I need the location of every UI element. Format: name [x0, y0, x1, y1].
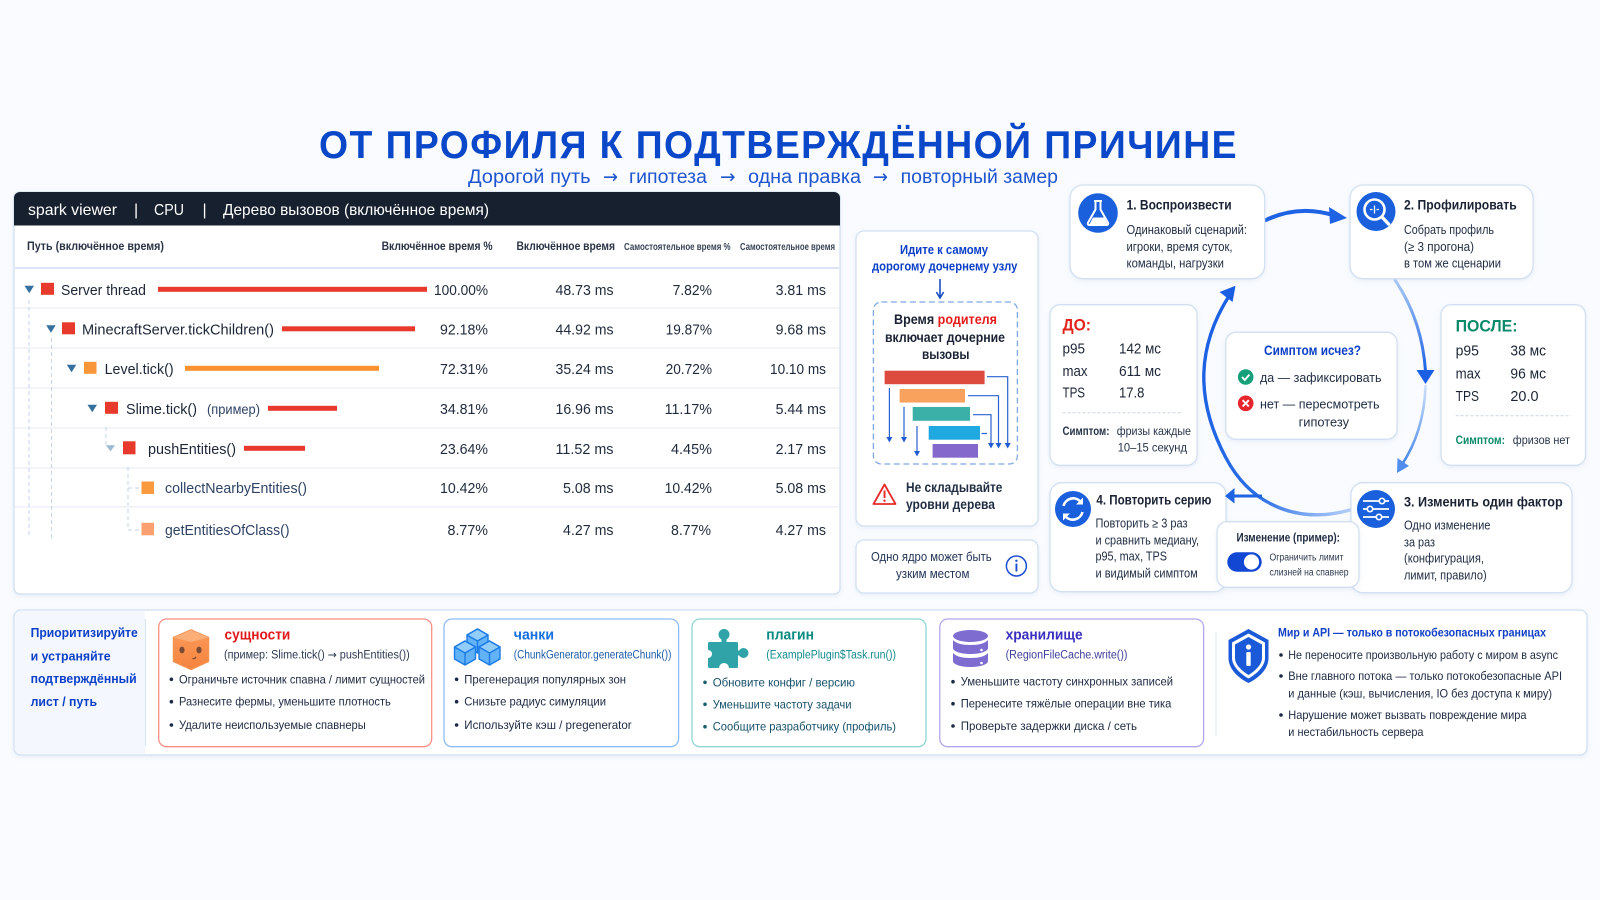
panel: step 3 change one factor: Одно изменение: [1404, 519, 1491, 533]
prioritize label: [31, 625, 138, 709]
toggle: [1227, 552, 1262, 572]
panel: one core note: [856, 540, 1038, 593]
icon: puzzle: [704, 629, 748, 673]
panel: before metrics: [1050, 305, 1197, 465]
dashed box: parent includes children: [873, 302, 1017, 464]
panel: step 3 change one factor: за раз: [1404, 535, 1435, 549]
arrow: step 1 to step 2: [1266, 207, 1347, 224]
panel: step 2 profile: Собрать профиль: [1404, 223, 1494, 237]
panel: change example toggle: Ограничить лимит: [1270, 553, 1344, 564]
panel: before metrics: фризы каждые: [1117, 424, 1191, 438]
panel: step 4 repeat: Повторить ≥ 3 раз: [1096, 517, 1188, 531]
row: Slime.tick: 5.44 ms: [776, 402, 826, 418]
dashed box: parent includes children: включает дочерние: [885, 330, 1005, 345]
card: storage: [940, 619, 1204, 747]
row: Server thread: [24, 282, 826, 299]
thread safety notes: Вне главного потока — только потокобезопасные API: [1288, 669, 1562, 683]
panel: after metrics: 38 мс: [1510, 343, 1546, 359]
panel: before metrics: 10–15 секунд: [1118, 441, 1187, 455]
thread safety notes: Мир и API — только в потокобезопасных границах: [1278, 626, 1546, 640]
row: Level.tick: [67, 361, 826, 378]
subtitle: одна правка: [748, 167, 861, 188]
icon: refresh: [1055, 491, 1091, 527]
panel: after metrics: 20.0: [1510, 389, 1538, 405]
warning: уровни дерева: [906, 497, 995, 512]
row: pushEntities: pushEntities(): [148, 441, 236, 458]
card: plugin: [692, 619, 926, 747]
panel: before metrics: 611 мс: [1119, 364, 1161, 380]
title: ОТ ПРОФИЛЯ К ПОДТВЕРЖДЁННОЙ ПРИЧИНЕ: [319, 122, 1238, 167]
panel: step 1 reproduce: команды, нагрузки: [1126, 257, 1224, 271]
arrow: loop from step 3 to step 1: [1204, 286, 1350, 515]
panel: before metrics: ДО:: [1062, 316, 1091, 335]
column headers: Самостоятельное время: [740, 242, 835, 253]
row: pushEntities: 2.17 ms: [776, 442, 826, 458]
row: collectNearbyEntities: [142, 480, 826, 497]
row: collectNearbyEntities: 5.08 ms: [776, 481, 826, 497]
card: storage: хранилище: [1006, 626, 1083, 643]
panel: symptom gone: нет — пересмотреть: [1260, 397, 1380, 411]
arrow: down: [936, 279, 944, 298]
panel: step 4 repeat: 4. Повторить серию: [1096, 491, 1211, 507]
dashed box: parent includes children: вызовы: [922, 347, 969, 362]
panel: step 3 change one factor: [1351, 483, 1572, 593]
panel: step 4 repeat: p95, max, TPS: [1096, 550, 1167, 564]
row: pushEntities: 11.52 ms: [556, 442, 614, 458]
card: plugin: плагин: [766, 626, 814, 643]
panel: symptom gone: Симптом исчез?: [1264, 343, 1361, 358]
panel: bottom recommendations: [14, 610, 1587, 755]
panel: step 2 profile: в том же сценарии: [1404, 257, 1501, 271]
card: storage: (RegionFileCache.write()): [1006, 649, 1128, 661]
row: Slime.tick: (пример): [207, 402, 260, 417]
icon: shield: [1228, 629, 1268, 683]
thread safety notes: Нарушение может вызвать повреждение мира: [1288, 708, 1527, 722]
row: collectNearbyEntities: 10.42%: [665, 481, 712, 497]
panel: step 3 change one factor: лимит, правило): [1404, 568, 1487, 582]
row: collectNearbyEntities: 5.08 ms: [563, 481, 614, 497]
panel: symptom gone: да — зафиксировать: [1260, 371, 1382, 385]
card: entities: сущности: [224, 626, 290, 643]
card: chunks: чанки: [514, 626, 554, 643]
panel: step 4 repeat: и сравнить медиану,: [1096, 533, 1199, 547]
row: Level.tick: Level.tick(): [105, 361, 174, 378]
prioritize label: подтверждённый: [31, 671, 137, 686]
card: plugin: (ExamplePlugin$Task.run()): [766, 649, 896, 661]
panel: step 3 change one factor: 3. Изменить один фактор: [1404, 494, 1563, 510]
panel: after metrics: [1441, 305, 1586, 465]
row: Level.tick: 20.72%: [666, 362, 712, 378]
column headers: Путь (включённое время): [27, 239, 164, 253]
card: chunks: Прегенерация популярных зон: [464, 672, 626, 686]
panel: after metrics: ПОСЛЕ:: [1456, 316, 1518, 335]
hint text: дорогому дочернему узлу: [872, 259, 1018, 274]
table dark header: Дерево вызовов (включённое время): [223, 202, 489, 219]
card: entities: [159, 619, 432, 747]
card: entities: Удалите неиспользуемые спавнеры: [179, 718, 366, 732]
hint text: Идите к самому: [900, 242, 989, 257]
prioritize label: лист / путь: [31, 694, 97, 709]
table dark header: [14, 192, 840, 226]
row: MinecraftServer.tickChildren: 9.68 ms: [776, 322, 826, 338]
prioritize label: и устраняйте: [31, 649, 111, 664]
panel: step 3 change one factor: (конфигурация,: [1404, 552, 1484, 566]
panel: call tree table: [14, 192, 840, 594]
column headers: Включённое время: [516, 239, 615, 253]
row: pushEntities: [106, 441, 826, 458]
panel: change example toggle: [1217, 522, 1359, 587]
subtitle: [468, 166, 1058, 188]
card: chunks: Используйте кэш / pregenerator: [464, 718, 632, 732]
table dark header: |: [202, 202, 207, 219]
card: plugin: Сообщите разработчику (профиль): [713, 720, 896, 734]
arrow: result to step 3: [1397, 386, 1426, 473]
panel: step 2 profile: (≥ 3 прогона): [1404, 240, 1474, 254]
row: MinecraftServer.tickChildren: 19.87%: [666, 322, 712, 338]
panel: after metrics: 96 мс: [1510, 367, 1546, 383]
icon: cross: [1238, 396, 1253, 411]
row: MinecraftServer.tickChildren: 92.18%: [440, 322, 488, 338]
panel: after metrics: TPS: [1456, 389, 1479, 405]
panel: before metrics: 17.8: [1119, 386, 1144, 402]
thread safety notes: и нестабильность сервера: [1288, 725, 1424, 739]
icon: check: [1238, 369, 1253, 385]
panel: step 2 profile: [1350, 185, 1533, 279]
row: Slime.tick: 34.81%: [440, 402, 488, 418]
panel: one core note: Одно ядро может быть: [871, 550, 992, 564]
thread safety notes: [1278, 626, 1562, 739]
row: Slime.tick: Slime.tick(): [126, 401, 197, 418]
panel: symptom gone: [1226, 332, 1397, 439]
icon: sliders: [1357, 490, 1395, 528]
icon: slime cube: [174, 630, 208, 670]
card: storage: Перенесите тяжёлые операции вне тика: [961, 697, 1172, 711]
panel: before metrics: Симптом:: [1062, 424, 1110, 438]
icon: flask: [1078, 193, 1118, 233]
panel: before metrics: 142 мс: [1119, 342, 1161, 358]
subtitle: повторный замер: [901, 167, 1058, 188]
table dark header: CPU: [154, 202, 184, 219]
panel: step 1 reproduce: 1. Воспроизвести: [1126, 196, 1232, 212]
panel: after metrics: max: [1456, 367, 1481, 383]
card: plugin: Уменьшите частоту задачи: [713, 697, 852, 711]
row: pushEntities: 23.64%: [440, 442, 488, 458]
row: MinecraftServer.tickChildren: 44.92 ms: [556, 322, 614, 338]
warning: [874, 480, 1003, 512]
icon: magnifier: [1356, 192, 1396, 231]
panel: after metrics: Симптом:: [1456, 433, 1505, 447]
card: entities: Ограничьте источник спавна / лимит сущностей: [179, 672, 425, 686]
row: Server thread: 100.00%: [434, 283, 488, 299]
column headers: Самостоятельное время %: [624, 242, 731, 253]
row: collectNearbyEntities: 10.42%: [440, 481, 488, 497]
panel: step 4 repeat: [1050, 483, 1226, 592]
panel: symptom gone: гипотезу: [1299, 415, 1350, 429]
row: Level.tick: 35.24 ms: [556, 362, 614, 378]
row: Slime.tick: [88, 401, 826, 418]
card: chunks: Снизьте радиус симуляции: [464, 695, 606, 709]
arrow: to step 4: [1225, 488, 1262, 504]
card: storage: Уменьшите частоту синхронных записей: [961, 675, 1173, 689]
subtitle: →: [873, 166, 888, 188]
row: Server thread: 7.82%: [673, 283, 712, 299]
row: getEntitiesOfClass: 8.77%: [671, 523, 711, 539]
icon: cubes: [454, 629, 500, 665]
thread safety notes: и данные (кэш, вычисления, IO без доступа к миру): [1288, 687, 1552, 701]
row: Server thread: 3.81 ms: [776, 283, 826, 299]
row: Slime.tick: 16.96 ms: [556, 402, 614, 418]
icon: info: [1006, 556, 1026, 576]
card: chunks: (ChunkGenerator.generateChunk()): [514, 649, 672, 661]
thread safety notes: Не переносите произвольную работу с миром в async: [1288, 648, 1558, 662]
row: MinecraftServer.tickChildren: [46, 321, 826, 338]
column headers: [27, 239, 835, 253]
row: Server thread: 48.73 ms: [556, 283, 614, 299]
row: Server thread: Server thread: [61, 282, 146, 299]
panel: change example toggle: Изменение (пример):: [1236, 530, 1340, 544]
arrow: step 2 to result: [1395, 280, 1434, 384]
panel: step 2 profile: 2. Профилировать: [1404, 196, 1517, 212]
card: storage: Проверьте задержки диска / сеть: [961, 719, 1137, 733]
panel: one core note: узким местом: [896, 567, 969, 581]
column headers: Включённое время %: [382, 239, 493, 253]
row: getEntitiesOfClass: [142, 522, 826, 539]
panel: after metrics: фризов нет: [1513, 433, 1570, 447]
panel: before metrics: p95: [1062, 342, 1085, 358]
icon: database: [953, 630, 988, 667]
hint text: [872, 242, 1018, 274]
row: getEntitiesOfClass: getEntitiesOfClass(): [165, 522, 290, 539]
panel: inclusive time explanation: [856, 231, 1038, 526]
row: collectNearbyEntities: collectNearbyEntities(): [165, 480, 307, 497]
panel: step 4 repeat: и видимый симптом: [1096, 566, 1198, 580]
table dark header: |: [134, 202, 138, 219]
card: entities: (пример: Slime.tick() → pushEntities()): [224, 647, 410, 661]
panel: change example toggle: слизней на спавнер: [1270, 567, 1349, 578]
panel: before metrics: max: [1062, 364, 1088, 380]
subtitle: →: [603, 166, 618, 188]
dashed box: parent includes children: Время родителя: [894, 312, 997, 327]
row: MinecraftServer.tickChildren: MinecraftServer.tickChildren(): [82, 321, 274, 338]
warning: Не складывайте: [906, 480, 1003, 495]
card: plugin: Обновите конфиг / версию: [713, 675, 855, 689]
row: Slime.tick: 11.17%: [665, 402, 712, 418]
row: Level.tick: 10.10 ms: [770, 362, 826, 378]
row: Level.tick: 72.31%: [440, 362, 488, 378]
panel: before metrics: TPS: [1062, 386, 1085, 402]
prioritize label: Приоритизируйте: [31, 625, 138, 640]
card: chunks: [444, 619, 679, 747]
panel: step 1 reproduce: [1070, 185, 1265, 279]
row: getEntitiesOfClass: 4.27 ms: [776, 523, 826, 539]
subtitle: Дорогой путь: [468, 167, 591, 188]
subtitle: гипотеза: [629, 167, 707, 188]
panel: step 1 reproduce: Одинаковый сценарий:: [1126, 223, 1247, 237]
card: entities: Разнесите фермы, уменьшите плотность: [179, 695, 391, 709]
table dark header: spark viewer: [28, 202, 118, 219]
row: getEntitiesOfClass: 4.27 ms: [563, 523, 614, 539]
subtitle: →: [720, 166, 736, 188]
panel: after metrics: p95: [1456, 343, 1479, 359]
panel: step 1 reproduce: игроки, время суток,: [1126, 240, 1232, 254]
row: getEntitiesOfClass: 8.77%: [448, 523, 488, 539]
row: pushEntities: 4.45%: [671, 442, 712, 458]
